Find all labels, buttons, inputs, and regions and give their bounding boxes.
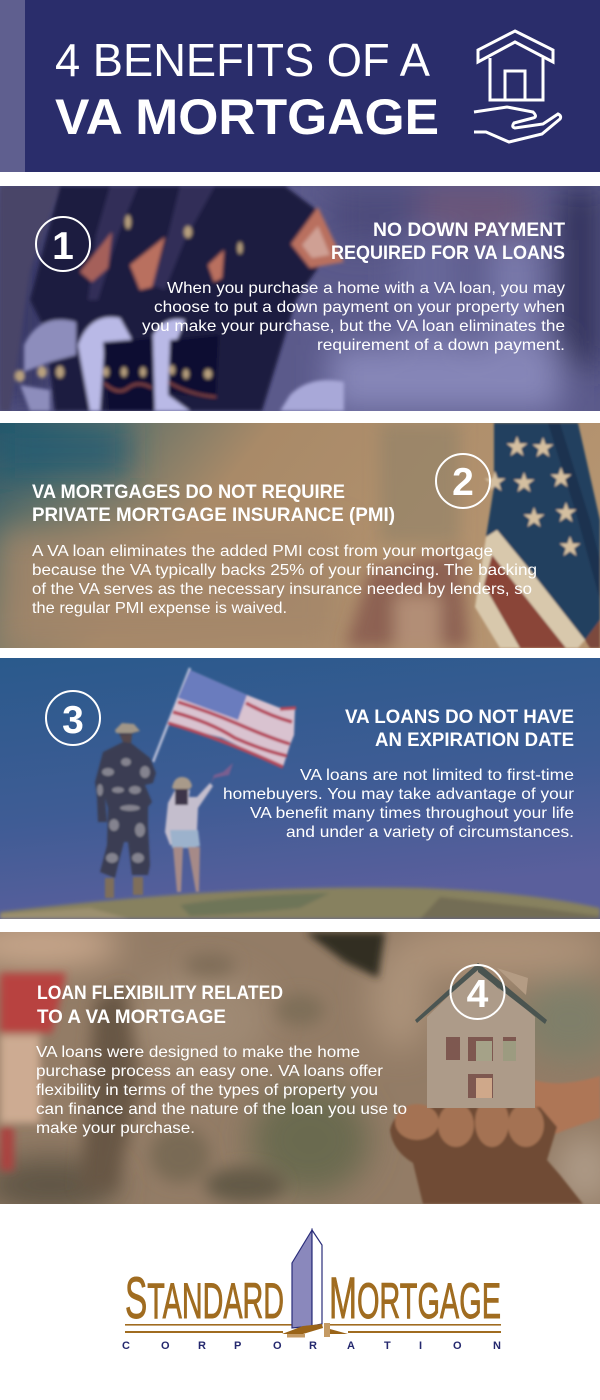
- title: 4 BENEFITS OF A: [55, 34, 430, 86]
- heading 1: [331, 220, 565, 264]
- photo: american flag: [0, 423, 600, 650]
- heading 3: VA LOANS DO NOT HAVE: [345, 707, 574, 728]
- number badge 4: 4: [467, 973, 489, 1016]
- panel 1: no down payment: [0, 186, 600, 411]
- body text 2: the regular PMI expense is waived.: [32, 600, 287, 617]
- number badge 3: 3: [62, 699, 84, 742]
- heading 3: [345, 707, 574, 751]
- number badge 1: 1: [52, 225, 74, 268]
- wordmark: [125, 1266, 501, 1331]
- heading 4: TO A VA MORTGAGE: [37, 1007, 226, 1028]
- icon: tower: [292, 1230, 322, 1328]
- number badge 3: [46, 691, 100, 745]
- title: VA MORTGAGE: [55, 89, 439, 145]
- photo: model house on hand: [0, 922, 600, 1213]
- header banner: [0, 0, 600, 172]
- heading 2: PRIVATE MORTGAGE INSURANCE (PMI): [32, 505, 395, 526]
- body text 4: flexibility in terms of the types of property you: [36, 1082, 378, 1099]
- model house: [415, 963, 547, 1108]
- logo rules: [125, 1324, 501, 1333]
- panel 3: no expiration date: [0, 658, 600, 919]
- icon: house on open hand: [474, 31, 561, 142]
- child figure: [165, 763, 233, 892]
- body text 1: you make your purchase, but the VA loan eliminates the: [142, 318, 565, 335]
- body text 2: A VA loan eliminates the added PMI cost from your mortgage: [32, 543, 493, 560]
- body text 2: because the VA typically backs 25% of your financing. The backing: [32, 562, 537, 579]
- body text 1: choose to put a down payment on your property when: [154, 299, 565, 316]
- body text 3: and under a variety of circumstances.: [286, 824, 574, 841]
- hand: [390, 1076, 600, 1204]
- heading 2: [32, 482, 395, 526]
- body text 4: purchase process an easy one. VA loans offer: [36, 1063, 384, 1080]
- corporation text: CORPORATION: [122, 1340, 501, 1352]
- body text 2: [32, 543, 537, 617]
- body text 3: [223, 767, 575, 841]
- body text 3: VA loans are not limited to first-time: [300, 767, 574, 784]
- icon: small house: [282, 1323, 348, 1338]
- title: [55, 34, 439, 145]
- heading 4: LOAN FLEXIBILITY RELATED: [37, 983, 283, 1004]
- body text 1: When you purchase a home with a VA loan, you may: [167, 280, 565, 297]
- heading 1: REQUIRED FOR VA LOANS: [331, 243, 565, 264]
- body text 1: [142, 280, 565, 354]
- photo: uniformed guards: [0, 186, 600, 411]
- body text 4: [36, 1044, 407, 1137]
- flag and pole: [153, 668, 296, 767]
- wordmark: STANDARD: [125, 1266, 284, 1331]
- number badge 4: [450, 965, 504, 1019]
- heading 4: [37, 983, 283, 1028]
- body text 3: homebuyers. You may take advantage of your: [223, 786, 575, 803]
- soldier figure: [95, 723, 156, 898]
- panel 2: no PMI: [0, 423, 600, 650]
- body text 4: VA loans were designed to make the home: [36, 1044, 360, 1061]
- body text 4: make your purchase.: [36, 1120, 195, 1137]
- logo: Standard Mortgage Corporation: [122, 1230, 501, 1352]
- body text 2: of the VA serves as the necessary insurance needed by lenders, so: [32, 581, 532, 598]
- panel 4: loan flexibility: [0, 922, 600, 1213]
- heading 3: AN EXPIRATION DATE: [375, 730, 574, 751]
- heading 1: NO DOWN PAYMENT: [373, 220, 565, 241]
- body text 4: can finance and the nature of the loan you use to: [36, 1101, 407, 1118]
- photo: soldier and child with flag: [0, 668, 600, 919]
- body text 1: requirement of a down payment.: [317, 337, 565, 354]
- heading 2: VA MORTGAGES DO NOT REQUIRE: [32, 482, 345, 503]
- number badge 2: 2: [452, 461, 474, 504]
- number badge 1: [36, 217, 90, 271]
- number badge 2: [436, 454, 490, 508]
- wordmark: MORTGAGE: [329, 1266, 501, 1331]
- grassy hill: [0, 888, 600, 919]
- body text 3: VA benefit many times throughout your life: [250, 805, 574, 822]
